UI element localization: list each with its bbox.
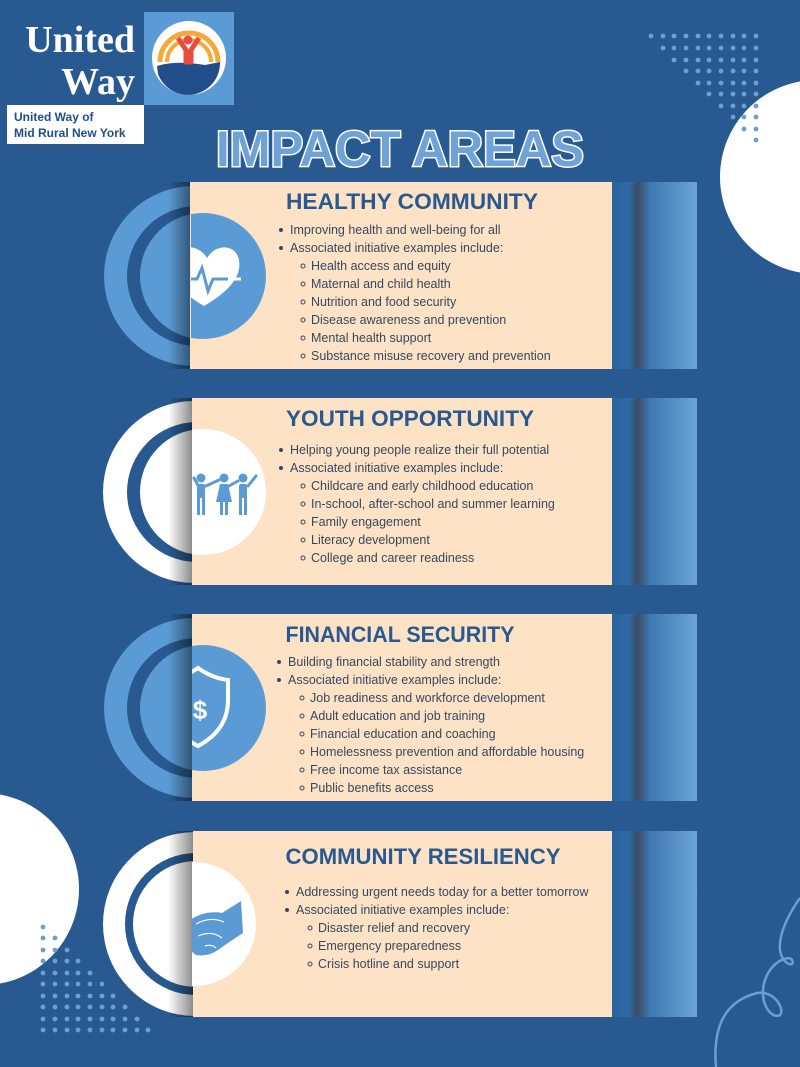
icon: handshake [188, 901, 243, 955]
list: Improving health and well-being for all [290, 223, 501, 237]
list: Emergency preparedness [318, 939, 461, 953]
list: College and career readiness [311, 551, 474, 565]
list: Disease awareness and prevention [311, 313, 506, 327]
logo subtitle box: Mid Rural New York [14, 126, 126, 140]
list: Helping young people realize their full potential [290, 443, 549, 457]
icon: shield dollar [192, 666, 230, 748]
title: IMPACT AREAS [216, 121, 584, 177]
dots bottom left [41, 925, 150, 1032]
list: In-school, after-school and summer learning [311, 497, 555, 511]
dots top right [649, 34, 758, 142]
list: Addressing urgent needs today for a better tomorrow [296, 885, 589, 899]
panel: financial security [104, 614, 697, 801]
icon: shield dollar: $ [193, 695, 208, 725]
side tab [612, 182, 697, 369]
list [285, 885, 589, 971]
panel: community resiliency [103, 831, 697, 1017]
heading: HEALTHY COMMUNITY [286, 189, 538, 214]
icon: people [194, 474, 256, 515]
logo emblem [144, 12, 234, 105]
heading: FINANCIAL SECURITY [286, 622, 515, 647]
list: Substance misuse recovery and prevention [311, 349, 551, 363]
panel: healthy community [104, 182, 697, 369]
decorative circle top right [720, 80, 800, 274]
list [277, 655, 584, 795]
list [279, 443, 555, 565]
logo subtitle box: United Way of [14, 110, 95, 124]
logo: Way [61, 61, 135, 103]
side tab [612, 831, 697, 1017]
side tab [612, 398, 697, 585]
icon: heart [191, 247, 241, 306]
side tab [612, 614, 697, 801]
list: Homelessness prevention and affordable housing [310, 745, 584, 759]
squiggle bottom right [715, 898, 800, 1067]
list: Crisis hotline and support [318, 957, 460, 971]
list: Family engagement [311, 515, 421, 529]
list: Associated initiative examples include: [296, 903, 509, 917]
logo subtitle box [7, 105, 144, 144]
heading: COMMUNITY RESILIENCY [286, 844, 561, 869]
list: Health access and equity [311, 259, 451, 273]
panel: youth opportunity [103, 398, 697, 585]
logo [7, 12, 234, 144]
decorative circle bottom left [0, 793, 79, 985]
list: Associated initiative examples include: [288, 673, 501, 687]
heading: YOUTH OPPORTUNITY [286, 406, 534, 431]
list: Childcare and early childhood education [311, 479, 533, 493]
list: Financial education and coaching [310, 727, 496, 741]
list: Maternal and child health [311, 277, 451, 291]
list: Associated initiative examples include: [290, 461, 503, 475]
list: Disaster relief and recovery [318, 921, 471, 935]
list: Job readiness and workforce development [310, 691, 545, 705]
list: Literacy development [311, 533, 430, 547]
list: Building financial stability and strength [288, 655, 500, 669]
list: Nutrition and food security [311, 295, 457, 309]
logo wordmark: United [25, 19, 135, 61]
list: Associated initiative examples include: [290, 241, 503, 255]
list [279, 223, 551, 363]
list: Adult education and job training [310, 709, 485, 723]
list: Mental health support [311, 331, 432, 345]
list: Public benefits access [310, 781, 434, 795]
list: Free income tax assistance [310, 763, 462, 777]
